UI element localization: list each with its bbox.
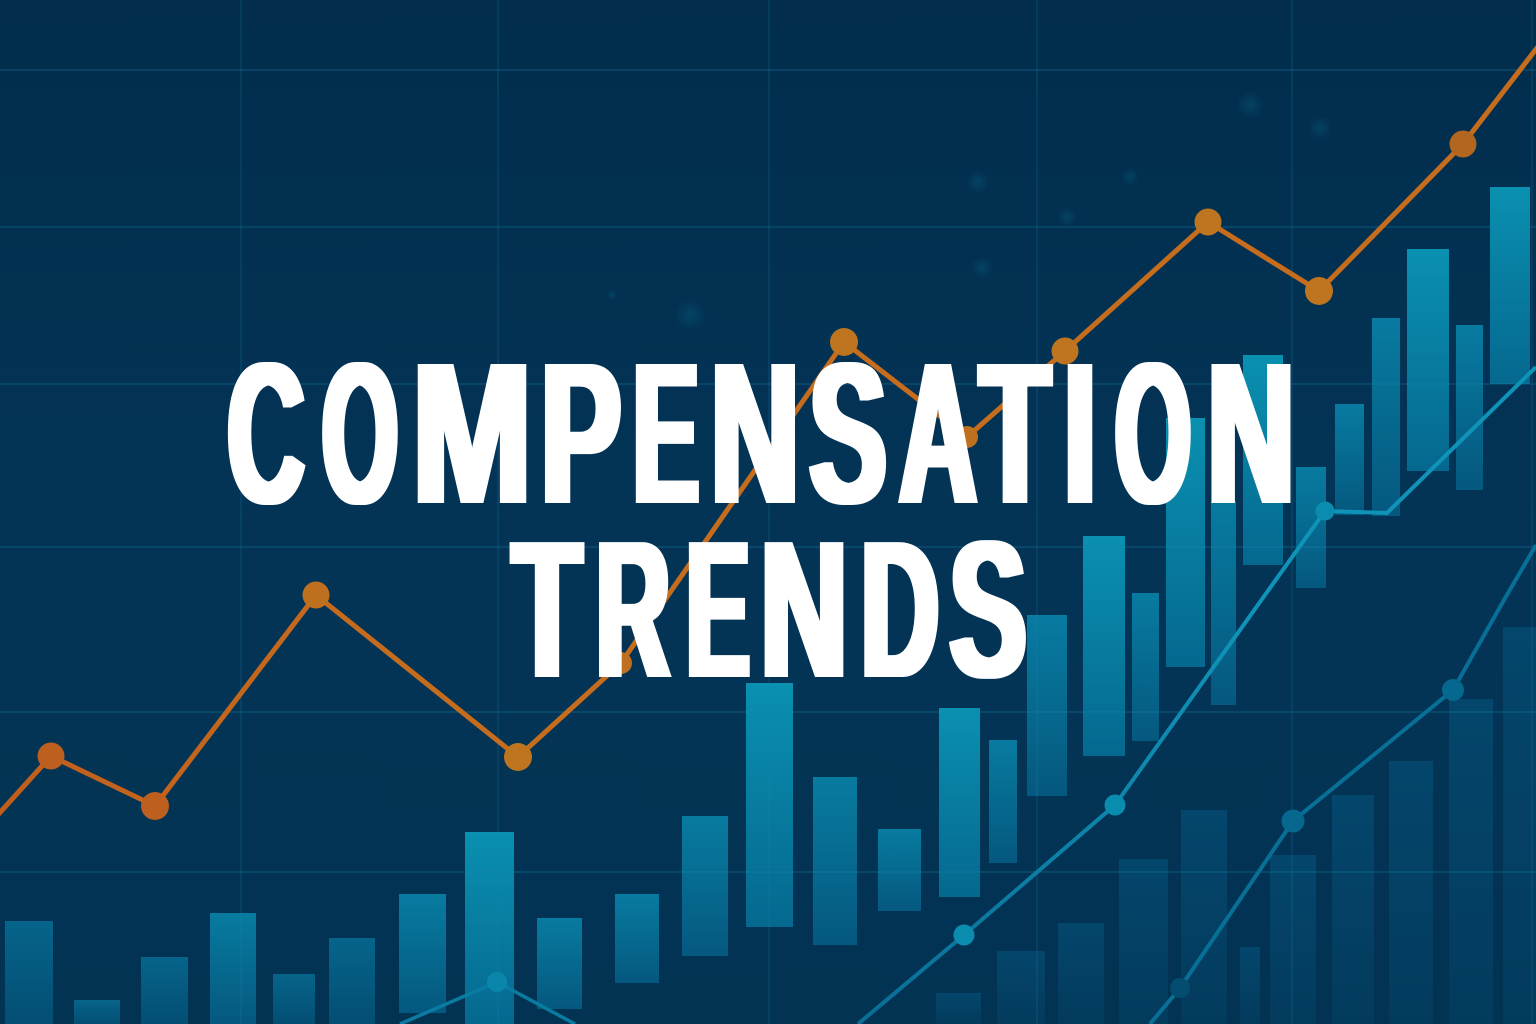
title line 1 bbox=[227, 320, 1295, 546]
title line 1: A bbox=[899, 320, 976, 546]
title line 1: C bbox=[227, 320, 305, 546]
title line 2: T bbox=[512, 500, 581, 719]
title line 2: N bbox=[761, 500, 847, 719]
title line 1: T bbox=[980, 320, 1050, 546]
title line 1: O bbox=[322, 320, 398, 546]
blue trend line: lower left bbox=[400, 972, 575, 1024]
title line 2: E bbox=[687, 500, 749, 719]
blue trend line: right bbox=[1150, 545, 1536, 1024]
title bbox=[227, 320, 1295, 719]
title line 2: R bbox=[596, 500, 670, 719]
title line 1: S bbox=[809, 320, 886, 546]
orange trend line bbox=[0, 44, 1536, 820]
title line 2 bbox=[510, 500, 1026, 719]
blue trend line: main bbox=[858, 367, 1536, 1024]
title line 2: D bbox=[861, 500, 939, 719]
title line 1: M bbox=[412, 320, 531, 546]
title line 1: N bbox=[711, 320, 799, 546]
bar chart: dim background bars bbox=[936, 627, 1536, 1024]
title line 2: S bbox=[949, 500, 1026, 719]
title line 1: N bbox=[1207, 320, 1295, 546]
title line 1: I bbox=[1064, 320, 1096, 546]
title line 1: E bbox=[633, 320, 699, 546]
title line 1: O bbox=[1115, 320, 1191, 546]
title line 1: P bbox=[541, 320, 621, 546]
